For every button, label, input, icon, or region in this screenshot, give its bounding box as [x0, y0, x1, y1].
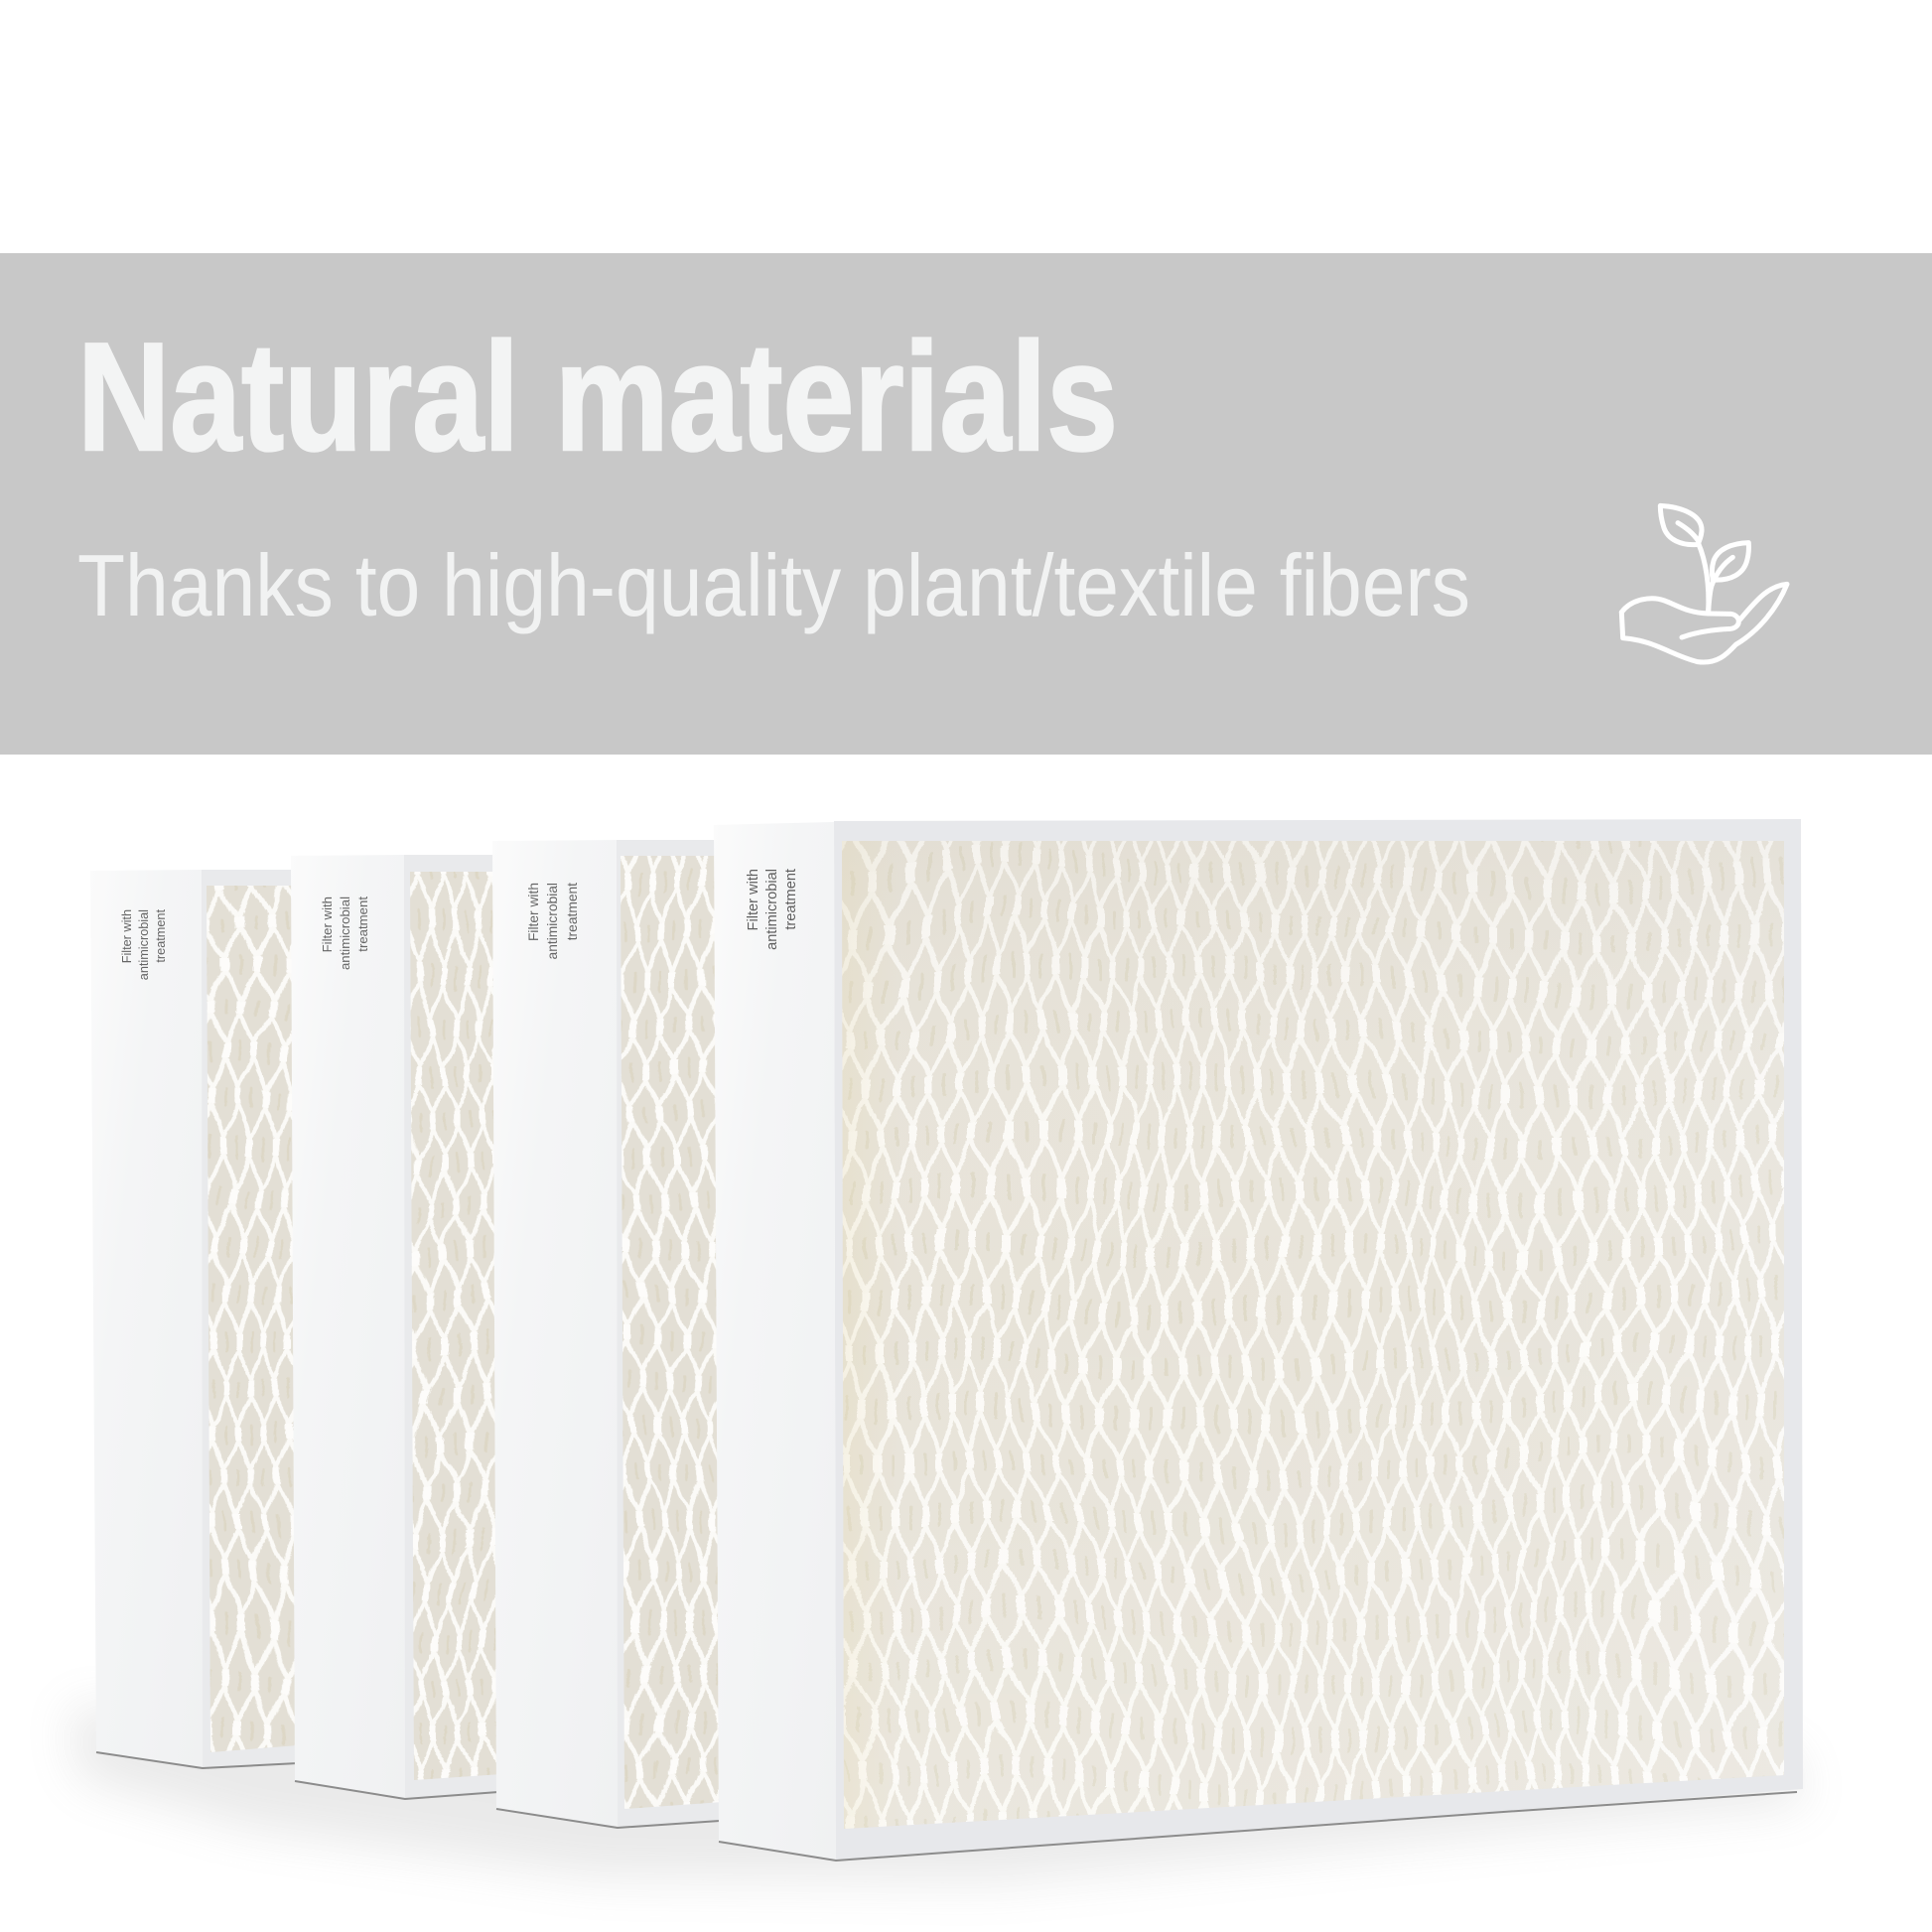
- subtitle: Thanks to high-quality plant/textile fibers: [77, 536, 1470, 634]
- honeycomb mesh: [207, 886, 295, 1752]
- side label: Filter with: [120, 909, 134, 963]
- title: Natural materials: [77, 311, 1118, 483]
- side panel: [291, 855, 405, 1798]
- honeycomb mesh: [842, 841, 1784, 1829]
- front frame: [617, 840, 834, 1827]
- side label: treatment: [783, 869, 799, 930]
- contact edge: [96, 1752, 298, 1768]
- side label: Filter with: [746, 869, 761, 930]
- honeycomb mesh: [621, 856, 719, 1809]
- side label: [320, 897, 370, 970]
- side label: antimicrobial: [545, 883, 560, 959]
- filter cartridge 4 (front): [714, 794, 1847, 1886]
- side label: [120, 909, 168, 980]
- contact edge: [719, 1792, 1797, 1861]
- ground shadow: [69, 1708, 1807, 1881]
- contact edge: [496, 1809, 720, 1828]
- side label: Filter with: [526, 883, 541, 941]
- side label: treatment: [154, 909, 168, 963]
- side label: antimicrobial: [137, 909, 151, 980]
- filter cartridge 3: [492, 840, 719, 1829]
- front frame: [202, 870, 417, 1767]
- side label: treatment: [355, 897, 370, 952]
- contact edge: [295, 1781, 498, 1799]
- heading band: [0, 253, 1932, 755]
- side label: antimicrobial: [338, 897, 352, 970]
- side label: antimicrobial: [764, 869, 780, 950]
- filter cartridge 1: [93, 870, 295, 1769]
- side label: treatment: [565, 883, 580, 940]
- icon: seedling in hand: [1621, 505, 1787, 662]
- side panel: [714, 822, 836, 1860]
- side panel: [492, 840, 618, 1827]
- side label: [746, 869, 799, 950]
- side panel: [90, 870, 203, 1767]
- front frame: [834, 819, 1803, 1860]
- honeycomb mesh: [410, 872, 496, 1780]
- side label: Filter with: [320, 897, 335, 952]
- side label: [526, 883, 580, 959]
- filter cartridge 2: [291, 855, 496, 1800]
- front frame: [404, 855, 616, 1798]
